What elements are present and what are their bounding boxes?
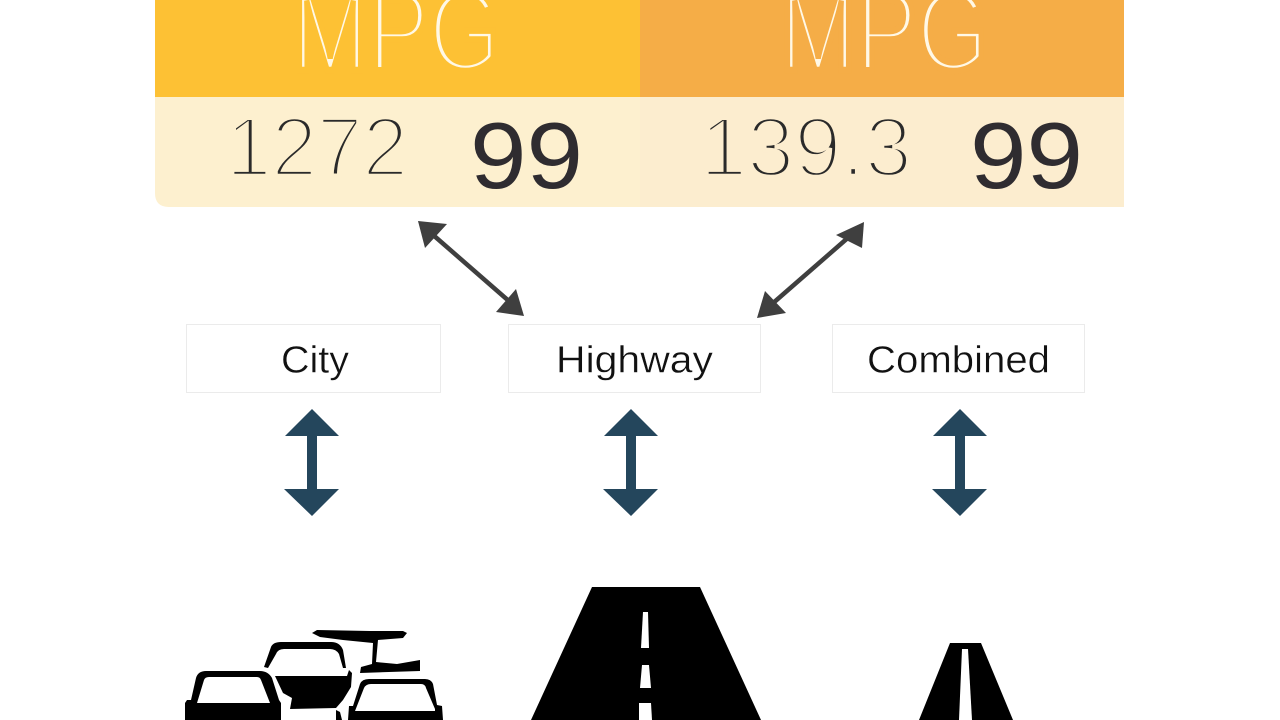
arrow: right card to Highway bbox=[757, 222, 864, 318]
middle car roof bbox=[264, 642, 346, 668]
label box: Highway: Highway bbox=[556, 340, 713, 382]
middle car body bbox=[275, 670, 352, 709]
left card header band bbox=[155, 0, 640, 97]
arrow: Combined vertical double arrow bbox=[932, 409, 987, 516]
left car bbox=[185, 671, 281, 720]
label box: Highway bbox=[508, 324, 760, 392]
label box: City: City bbox=[281, 340, 349, 382]
arrow: City vertical double arrow bbox=[284, 409, 339, 516]
panel: left MPG card bbox=[155, 0, 640, 208]
arrow: Highway vertical double arrow bbox=[603, 409, 658, 516]
label box: Combined bbox=[832, 324, 1084, 392]
label box: Combined: Combined bbox=[867, 340, 1050, 382]
icon: highway road bbox=[531, 587, 761, 720]
right card value band bbox=[640, 96, 1124, 207]
background vehicle silhouette bbox=[312, 630, 420, 673]
icon: city traffic bbox=[185, 630, 443, 720]
label box: City bbox=[186, 324, 440, 392]
right value: 139.3: 139.3 bbox=[700, 100, 912, 194]
panel: right MPG card bbox=[640, 0, 1124, 208]
right card header band bbox=[640, 0, 1124, 97]
left value: 99: 99 bbox=[470, 103, 583, 208]
left value: 1272: 1272 bbox=[226, 100, 408, 194]
right value: 99: 99 bbox=[970, 103, 1083, 208]
left card value band bbox=[155, 96, 640, 207]
arrow: left card to Highway bbox=[418, 221, 524, 316]
right car bbox=[348, 679, 443, 720]
icon: combined road bbox=[919, 643, 1013, 720]
